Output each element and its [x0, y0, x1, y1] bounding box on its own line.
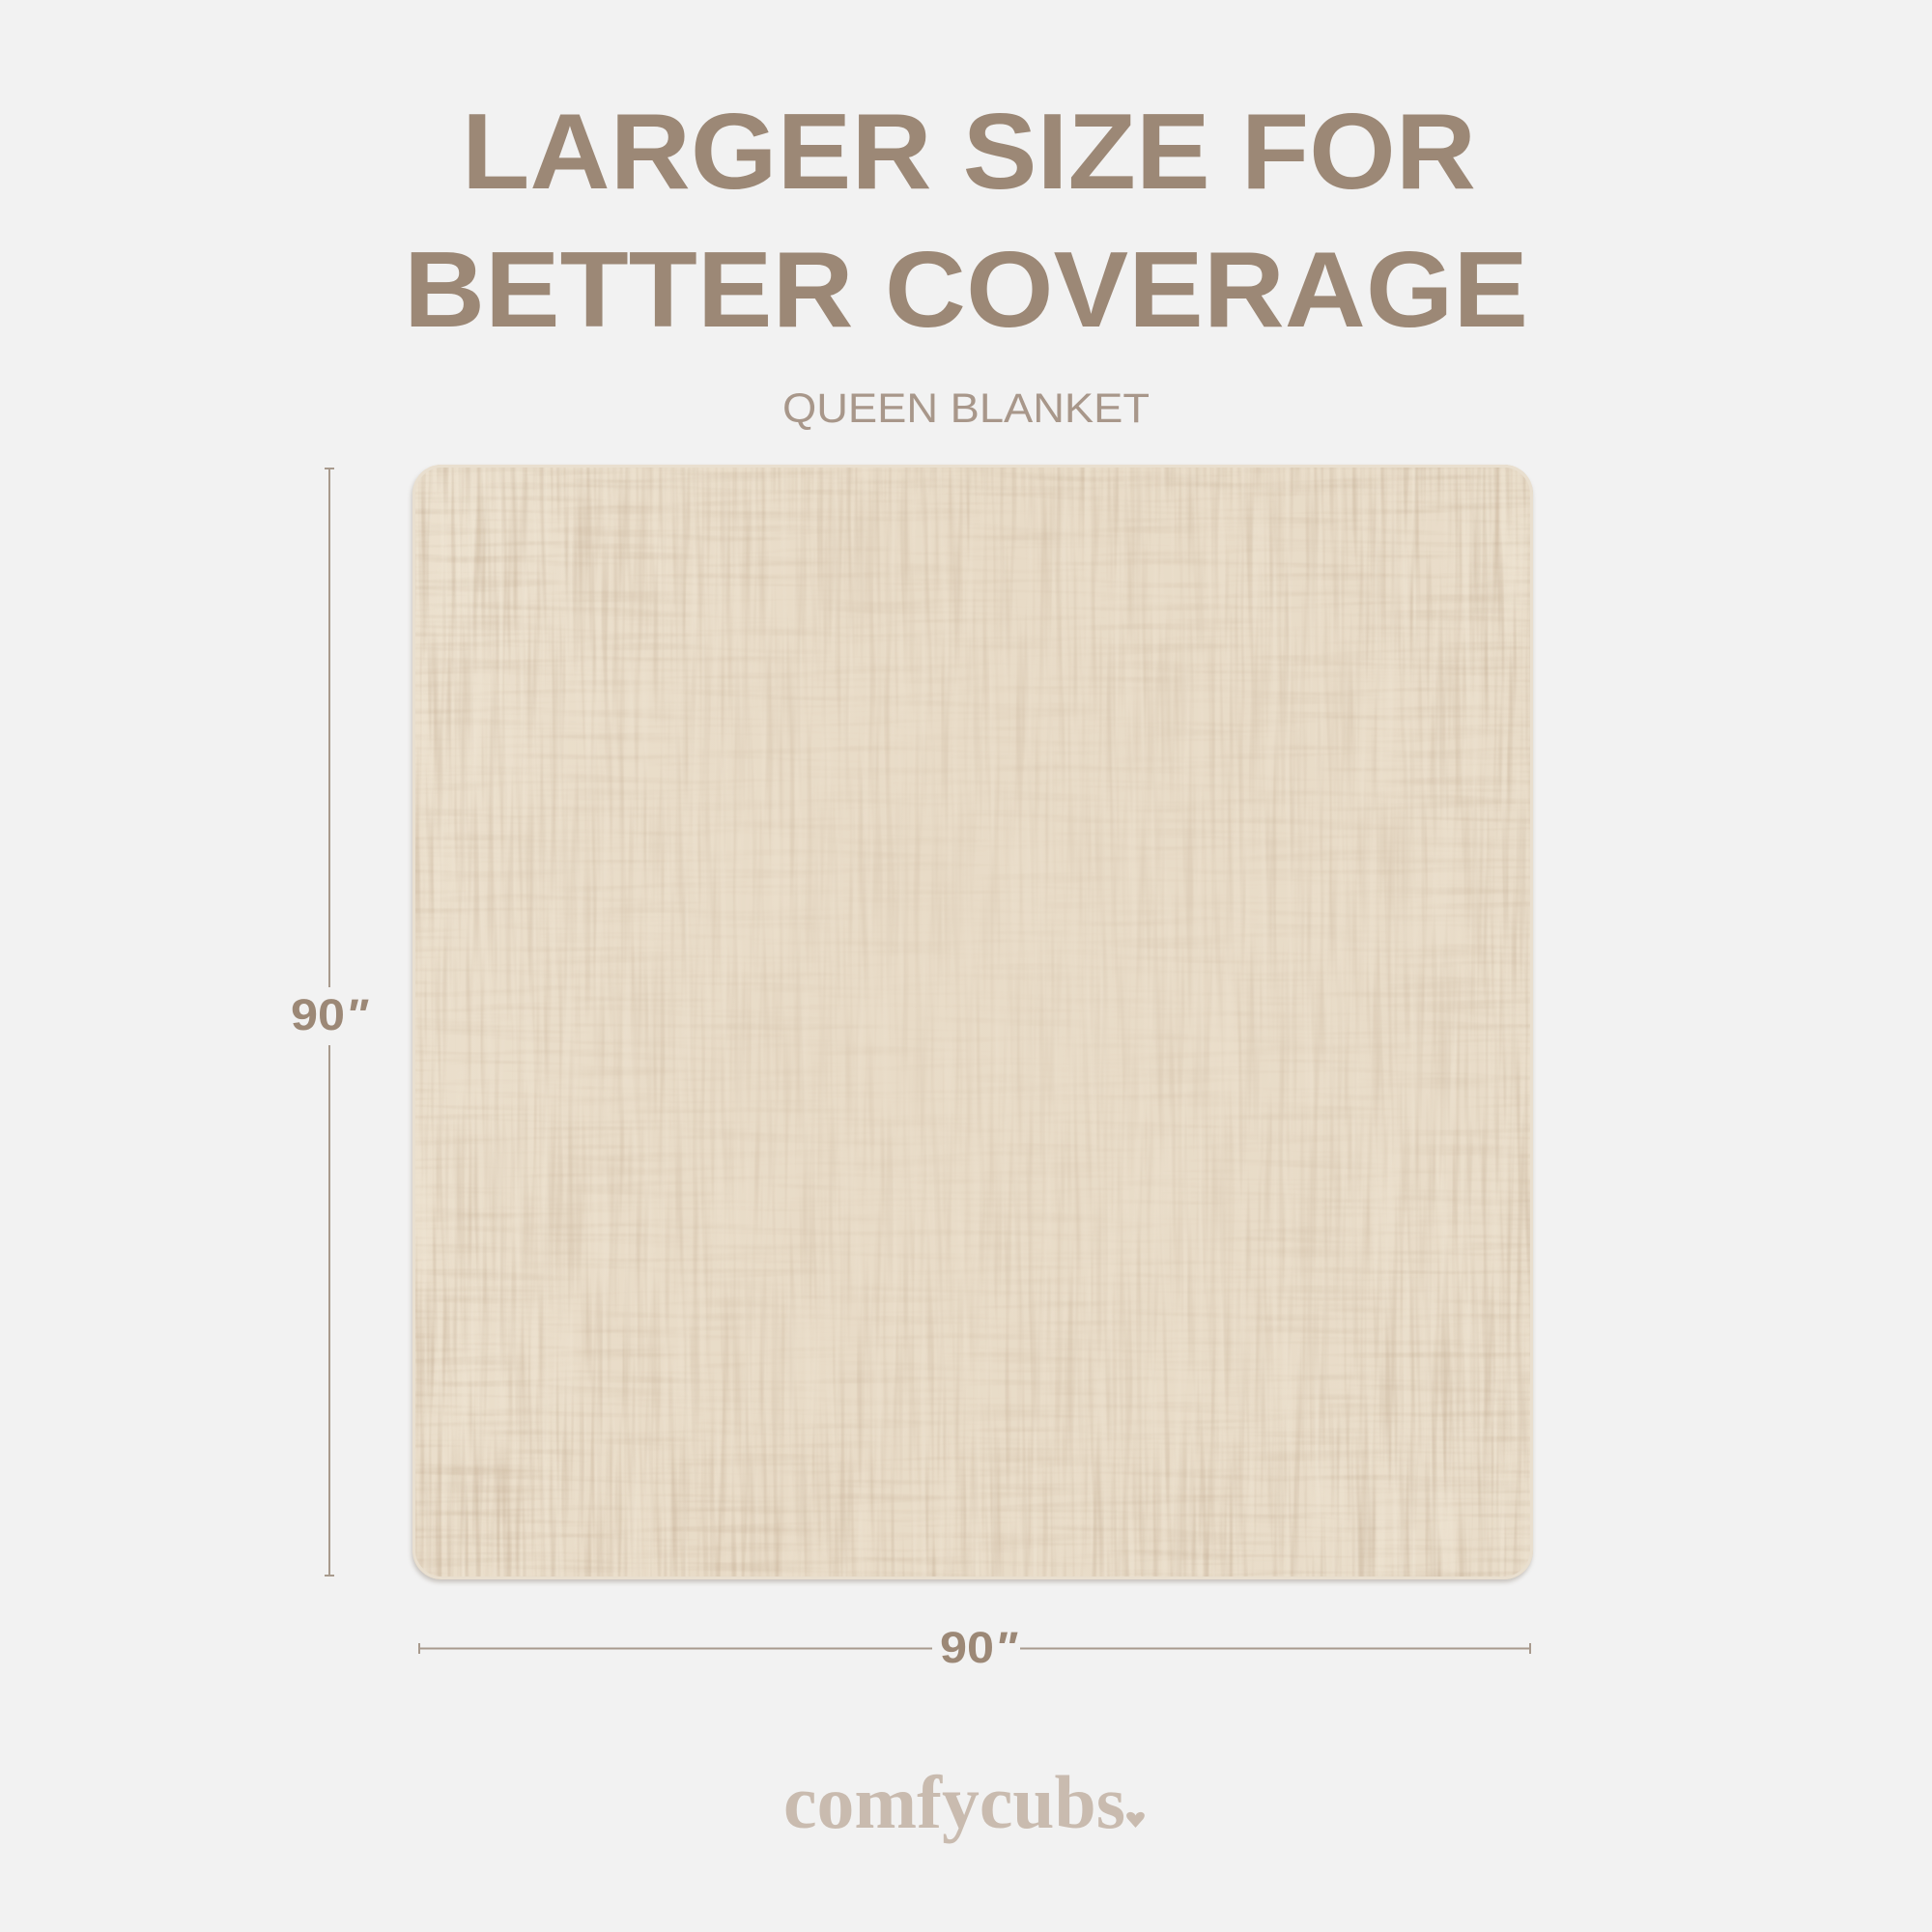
- logo: comfycubs: comfycubs: [783, 1760, 1125, 1844]
- blanket illustration: [412, 465, 1533, 1582]
- vertical dimension: 90 inches: [291, 469, 369, 1576]
- horizontal dimension: 90 inches: [419, 1623, 1530, 1672]
- subtitle: QUEEN BLANKET: [782, 385, 1150, 432]
- title: [404, 92, 1528, 350]
- icon: heart: [1126, 1812, 1145, 1828]
- title line 2: BETTER COVERAGE: [404, 230, 1528, 350]
- horizontal dimension: 90 inches: 90": [940, 1623, 1018, 1672]
- title line 1: LARGER SIZE FOR: [462, 92, 1476, 212]
- vertical dimension: 90 inches: 90": [291, 990, 369, 1039]
- infographic canvas: [292, 113, 1534, 1843]
